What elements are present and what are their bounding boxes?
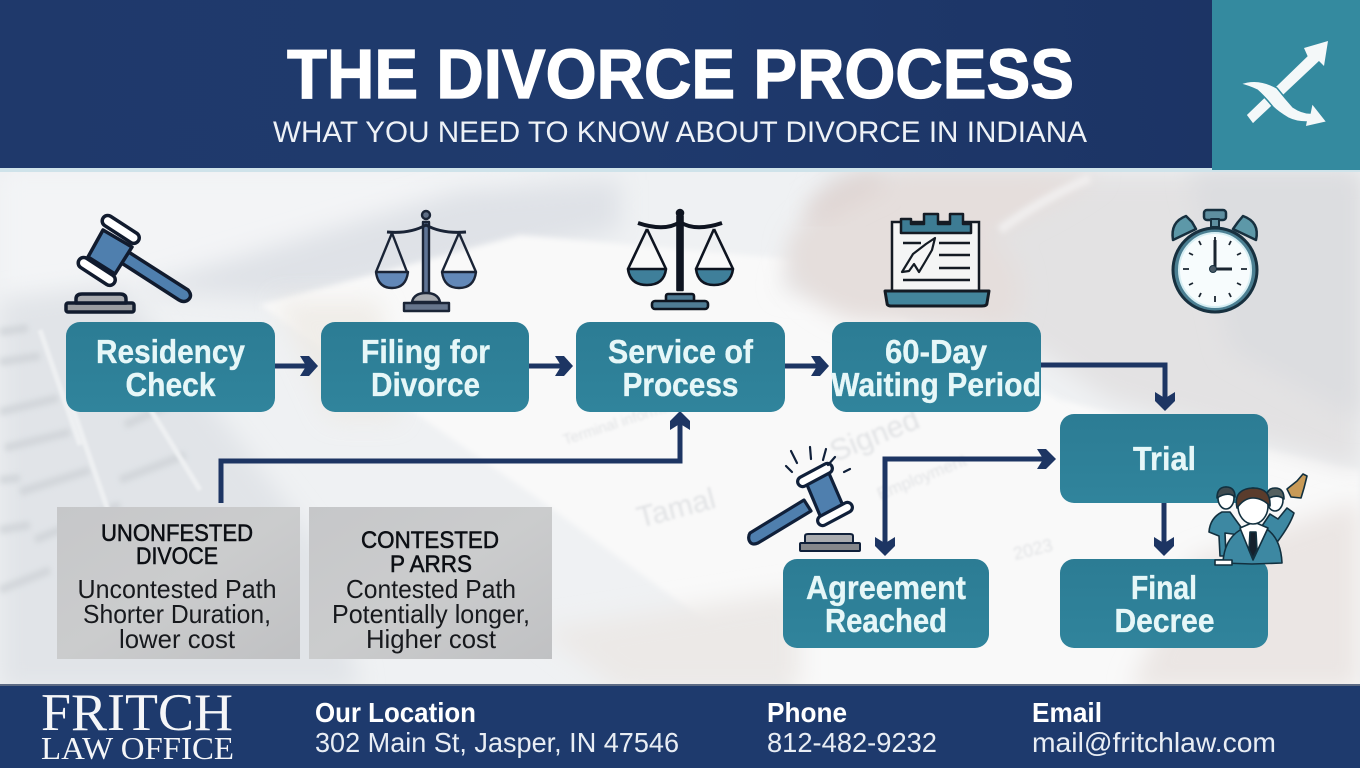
step: trial: Trial xyxy=(1133,440,1196,477)
step: filing for divorce: Filing for xyxy=(361,333,490,370)
footer logo xyxy=(41,684,234,766)
card body: Contested Path xyxy=(346,574,516,604)
step: 60-day waiting period: Waiting Period xyxy=(831,366,1041,403)
card body: lower cost xyxy=(119,624,236,654)
arrow: residency to filing xyxy=(275,356,318,376)
icon: calendar checklist xyxy=(885,214,989,306)
footer email: mail@fritchlaw.com xyxy=(1032,727,1276,758)
step: filing for divorce xyxy=(321,322,529,412)
icon: scales filing xyxy=(376,211,476,311)
step: residency check xyxy=(66,322,275,412)
arrow: filing to service xyxy=(529,356,573,376)
footer phone: 812-482-9232 xyxy=(767,727,937,758)
step: 60-day waiting period xyxy=(831,322,1041,412)
card heading xyxy=(361,527,499,578)
step: agreement reached: Reached xyxy=(825,602,947,639)
card heading: DIVOCE xyxy=(136,543,218,570)
background photo: blurred desk with document, keyboard and hand: Employment xyxy=(874,451,969,504)
step: residency check: Check xyxy=(126,366,216,403)
card heading: CONTESTED xyxy=(361,527,499,554)
background photo: blurred desk with document, keyboard and hand: 2023 xyxy=(1011,535,1055,564)
card body: Higher cost xyxy=(366,624,497,654)
step: agreement reached: Agreement xyxy=(806,569,966,606)
card body: Uncontested Path xyxy=(78,574,276,604)
subtitle: WHAT YOU NEED TO KNOW ABOUT DIVORCE IN INDIANA xyxy=(273,116,1087,149)
footer phone: Phone xyxy=(767,697,847,728)
icon: gavel residency xyxy=(66,213,190,312)
footer location: Our Location xyxy=(315,697,476,728)
footer phone xyxy=(767,697,937,758)
step: final decree: Decree xyxy=(1114,602,1214,639)
step: filing for divorce: Divorce xyxy=(371,366,480,403)
footer email: Email xyxy=(1032,697,1102,728)
icon: stopwatch alarm clock xyxy=(1173,210,1257,312)
background photo: blurred desk with document, keyboard and hand: Terminal information xyxy=(561,391,695,449)
title: THE DIVORCE PROCESS xyxy=(287,35,1074,113)
icon: legal team xyxy=(1209,474,1307,565)
arrow: trial to final decree xyxy=(1154,503,1174,556)
icon: scales service xyxy=(628,210,733,309)
background photo: blurred desk with document, keyboard and hand xyxy=(0,168,1360,690)
step: final decree xyxy=(1060,559,1268,648)
step: 60-day waiting period: 60-Day xyxy=(885,333,988,370)
icon: gavel with sparks xyxy=(749,447,860,551)
connector arrows xyxy=(221,356,1175,556)
header band xyxy=(0,0,1360,172)
arrow: junction to trial and agreement xyxy=(875,449,1056,556)
background photo: blurred desk with document, keyboard and hand: Tamal xyxy=(633,482,719,535)
footer location xyxy=(315,697,679,758)
step: service of process: Service of xyxy=(608,333,754,370)
footer logo: LAW OFFICE xyxy=(41,730,234,766)
step: service of process: Process xyxy=(622,366,738,403)
step: agreement reached xyxy=(783,559,989,648)
step: final decree: Final xyxy=(1131,569,1197,606)
arrow: waiting to trial xyxy=(1041,365,1175,411)
card heading xyxy=(101,520,253,570)
card body: Shorter Duration, xyxy=(83,599,271,629)
footer band xyxy=(0,684,1360,768)
icon: crossing arrows on teal square xyxy=(1212,0,1360,170)
arrow: paths to service xyxy=(221,411,690,503)
footer email xyxy=(1032,697,1276,758)
step: trial xyxy=(1060,414,1268,503)
card heading: UNONFESTED xyxy=(101,520,253,547)
card: uncontested path xyxy=(57,507,300,659)
footer logo: FRITCH xyxy=(41,684,233,742)
step: service of process xyxy=(576,322,785,412)
step: residency check: Residency xyxy=(96,333,246,370)
card body xyxy=(78,574,276,654)
background photo: blurred desk with document, keyboard and hand: Signed xyxy=(825,403,924,468)
card: contested path xyxy=(309,507,552,659)
card heading: P ARRS xyxy=(390,551,472,578)
card body xyxy=(332,574,530,654)
arrow: service to waiting xyxy=(785,356,829,376)
footer location: 302 Main St, Jasper, IN 47546 xyxy=(315,727,679,758)
card body: Potentially longer, xyxy=(332,599,530,629)
